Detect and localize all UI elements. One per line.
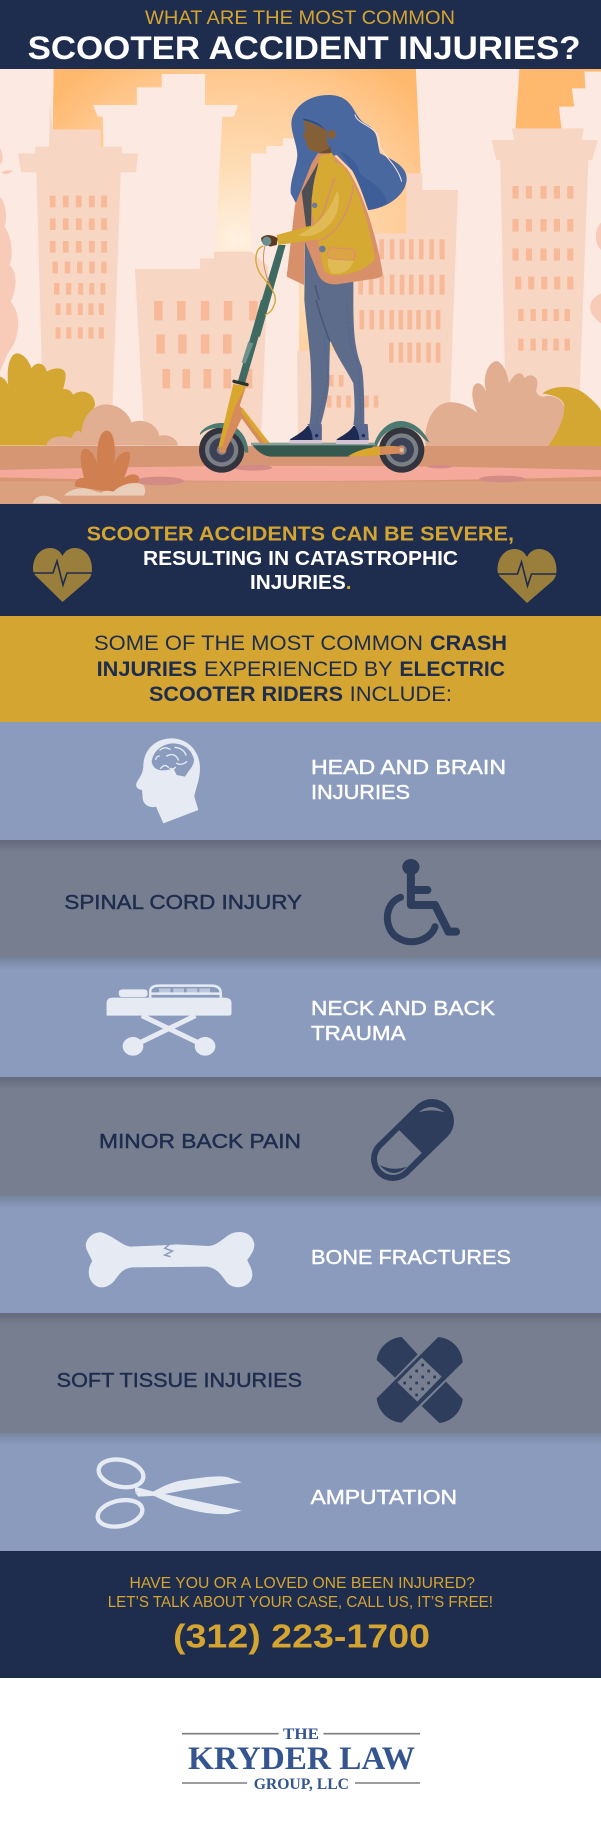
phone number: (312) 223-1700 (173, 1618, 430, 1655)
label: HEAD AND BRAIN (311, 756, 506, 779)
icon: left heart with pulse (33, 548, 92, 602)
icon: stretcher (107, 986, 232, 1056)
logo word: the: THE (283, 1726, 319, 1743)
jacket lining (287, 153, 383, 285)
icon: head with brain (136, 738, 200, 823)
intro line three (149, 683, 452, 706)
panel: amputation (0, 1433, 601, 1551)
light background buildings (0, 69, 601, 447)
lower legs and shoes (289, 300, 369, 444)
orange plant (75, 431, 139, 492)
right gold bush (542, 387, 601, 446)
pocket (328, 258, 353, 274)
intro line two (97, 658, 505, 681)
pink side trees (0, 148, 601, 372)
left gold bush (0, 353, 95, 446)
banner: severity message (0, 504, 601, 616)
fenders (200, 421, 429, 453)
plant base stones (33, 483, 145, 503)
upper scooter stem and cable (251, 245, 286, 337)
panel: soft tissue injuries (0, 1313, 601, 1433)
title line one: WHAT ARE THE MOST COMMON (145, 7, 455, 29)
panel: neck and back trauma (0, 958, 601, 1077)
front fork (218, 405, 270, 454)
rear wheel (379, 427, 424, 473)
question line: HAVE YOU OR A LOVED ONE BEEN INJURED? (130, 1575, 475, 1592)
intro line three: INCLUDE: (350, 683, 452, 706)
left foreground plants (0, 353, 184, 503)
building windows (50, 186, 573, 408)
rear arm (348, 446, 400, 456)
stem (238, 300, 262, 382)
sleeve (276, 224, 318, 245)
intro line two: INJURIES (97, 658, 197, 681)
mid-tone buildings (18, 102, 598, 447)
banner line one: SCOOTER ACCIDENTS CAN BE SEVERE, (87, 523, 514, 546)
intro line three: SCOOTER RIDERS (149, 683, 343, 706)
icon: wheelchair (387, 859, 456, 942)
icon: crossed bandage (377, 1337, 463, 1423)
right tan bush (425, 361, 565, 446)
shirt (302, 162, 318, 227)
icon: fractured bone (86, 1232, 254, 1287)
woman (251, 95, 407, 337)
intro line two: ELECTRIC (399, 658, 505, 681)
call to action (0, 1551, 601, 1678)
invitation line: LET’S TALK ABOUT YOUR CASE, CALL US, IT’S FREE! (108, 1594, 493, 1611)
label second line: INJURIES (311, 781, 410, 804)
hair (291, 95, 407, 210)
label: MINOR BACK PAIN (99, 1130, 301, 1153)
left shoe (289, 424, 322, 443)
right shoe (336, 424, 369, 444)
illustration: woman riding scooter in a city (0, 69, 601, 504)
icon: scissors (95, 1456, 242, 1530)
front wheel (199, 427, 244, 473)
neck and face (320, 146, 332, 154)
label second line: TRAUMA (311, 1022, 406, 1045)
deck (252, 445, 374, 457)
panel: spinal cord injury (0, 840, 601, 958)
intro line one: SOME OF THE MOST COMMON (94, 632, 423, 655)
icon: right heart with pulse (498, 549, 556, 603)
panel: head and brain injuries (0, 722, 601, 840)
panel: minor back pain (0, 1077, 601, 1196)
intro line two: EXPERIENCED BY (204, 658, 392, 681)
jacket body (312, 153, 375, 275)
icon: pill capsule (377, 1107, 445, 1175)
buttons (312, 203, 317, 208)
city background (0, 69, 601, 504)
header: title (0, 0, 601, 69)
title line two: SCOOTER ACCIDENT INJURIES? (28, 30, 581, 66)
gold intro band (0, 616, 601, 722)
logo: The Kryder Law Group (182, 1726, 420, 1793)
hand and grip (261, 235, 278, 247)
left tan bush (47, 404, 178, 446)
logo word: kryder law: KRYDER LAW (188, 1741, 415, 1777)
label: BONE FRACTURES (311, 1246, 511, 1269)
label: NECK AND BACK (311, 997, 495, 1020)
scooter (199, 300, 429, 473)
panel: bone fractures (0, 1196, 601, 1313)
label: AMPUTATION (310, 1486, 457, 1509)
logo word: group llc: GROUP, LLC (254, 1776, 349, 1793)
label: SPINAL CORD INJURY (64, 891, 302, 914)
jeans upper (304, 242, 353, 300)
banner line two: RESULTING IN CATASTROPHIC (143, 547, 458, 570)
road (0, 446, 601, 482)
banner line three: INJURIES. (250, 571, 352, 594)
label: SOFT TISSUE INJURIES (57, 1369, 302, 1392)
intro line one: CRASH (430, 632, 507, 655)
